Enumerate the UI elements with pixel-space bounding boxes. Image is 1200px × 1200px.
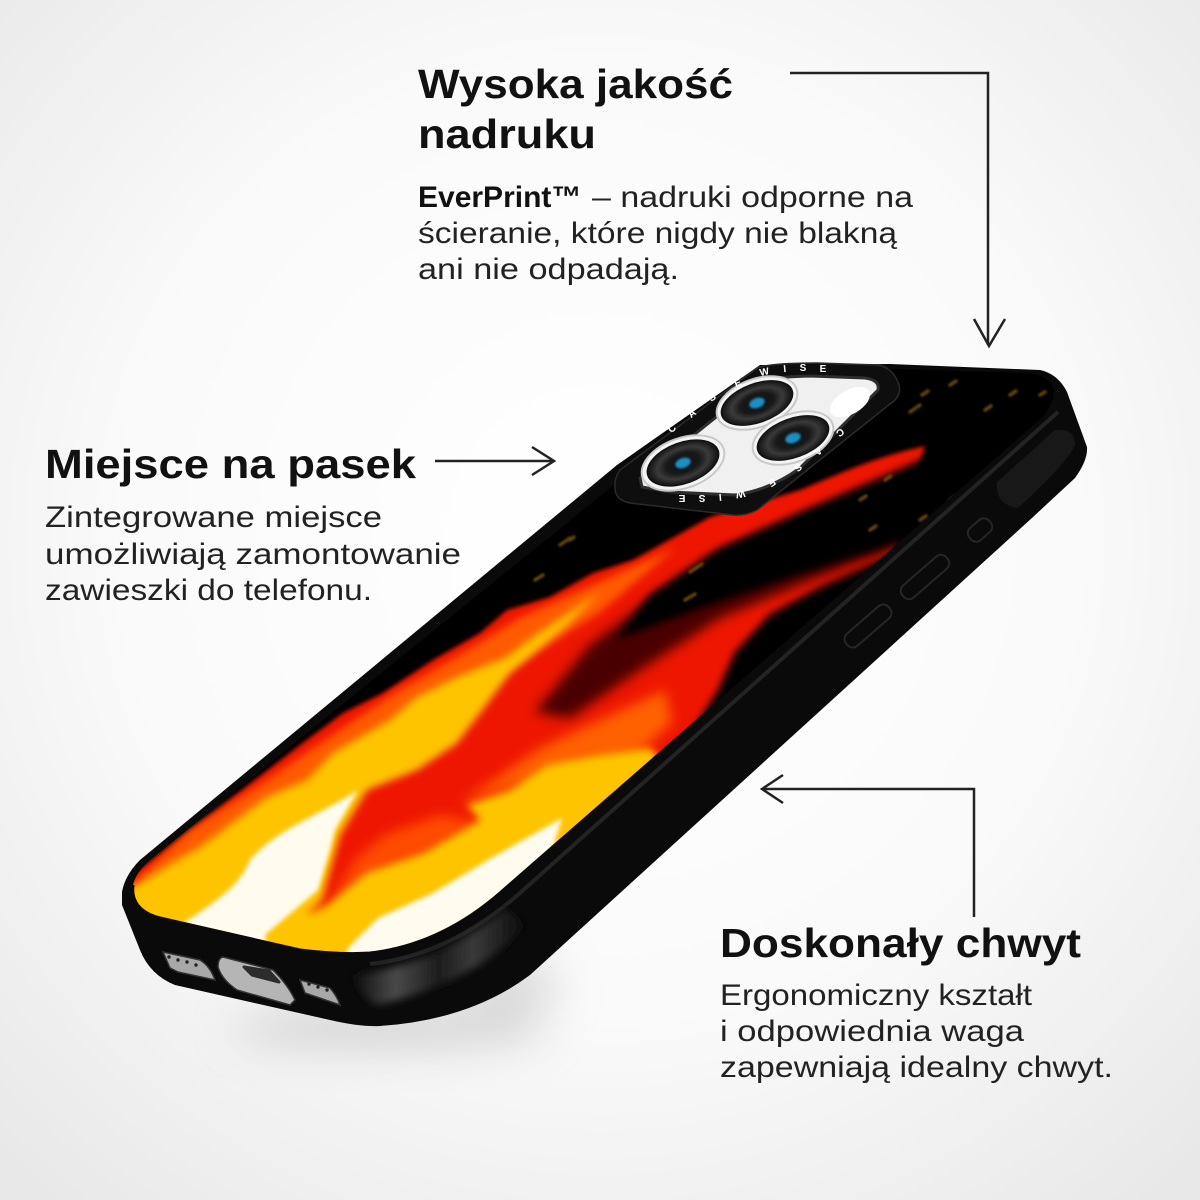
description: Zintegrowane miejsce bbox=[45, 501, 382, 534]
lower right black bbox=[690, 553, 895, 735]
ring lettering: I bbox=[783, 364, 787, 375]
ring lettering: S bbox=[707, 391, 719, 404]
ring lettering bbox=[666, 363, 846, 503]
arrow: to strap slot bbox=[435, 447, 554, 475]
bottom ports bbox=[163, 952, 340, 1005]
camera window bbox=[640, 376, 878, 495]
USB port bbox=[218, 957, 295, 1005]
description: ani nie odpadają. bbox=[418, 253, 679, 286]
ring lettering: E bbox=[820, 364, 827, 375]
ring lettering: S bbox=[698, 492, 705, 503]
callout: grip bbox=[720, 920, 1113, 1084]
orange lower blob bbox=[328, 815, 480, 905]
ring lettering: E bbox=[678, 492, 685, 503]
ring lettering: C bbox=[666, 423, 679, 436]
gold sparks bbox=[535, 381, 1045, 600]
dark streak bbox=[614, 454, 932, 642]
cream flames bbox=[180, 788, 564, 952]
yellow flames bbox=[120, 592, 665, 970]
ring lettering: E bbox=[733, 377, 744, 390]
ring lettering: E bbox=[765, 476, 777, 489]
ring lettering: W bbox=[759, 366, 771, 379]
arrow: to print bbox=[790, 73, 1005, 346]
camera bump bbox=[615, 363, 900, 515]
heading: Miejsce na pasek bbox=[45, 441, 416, 487]
description: EverPrint™ bbox=[418, 181, 581, 214]
description: umożliwiają zamontowanie bbox=[45, 538, 461, 571]
description: ścieranie, które nigdy nie blakną bbox=[418, 217, 897, 250]
heading: Wysoka jakość bbox=[418, 61, 733, 107]
case body bbox=[122, 364, 1087, 1026]
description bbox=[45, 501, 461, 607]
ring lettering: I bbox=[718, 491, 722, 502]
callout: print quality: nadruku bbox=[418, 111, 596, 157]
ring lettering: S bbox=[800, 363, 807, 374]
arrow: to grip bbox=[762, 775, 974, 917]
dark red band bbox=[530, 524, 903, 726]
callout: strap slot bbox=[45, 441, 461, 607]
strap slot bbox=[997, 430, 1075, 508]
description: Ergonomiczny kształt bbox=[720, 979, 1033, 1012]
red flame bbox=[133, 443, 928, 918]
phone shadow bbox=[230, 957, 560, 1048]
ring lettering: C bbox=[833, 425, 846, 438]
ring lettering: W bbox=[734, 487, 746, 500]
orange upper tongue bbox=[458, 690, 672, 805]
left speaker bbox=[163, 952, 215, 980]
side bevel bbox=[370, 412, 1058, 964]
print edge rim bbox=[133, 392, 1055, 954]
description: – nadruki odporne na bbox=[592, 181, 913, 214]
description: zapewniają idealny chwyt. bbox=[720, 1051, 1113, 1084]
lens top bbox=[709, 366, 805, 440]
flash bbox=[825, 381, 875, 423]
ring lettering: S bbox=[791, 461, 804, 473]
printed flame back bbox=[133, 369, 1054, 952]
corner gloss bbox=[352, 908, 525, 1005]
phone case illustration bbox=[100, 340, 1100, 1026]
lens right bbox=[745, 401, 841, 475]
description bbox=[418, 181, 913, 286]
description: i odpowiednia waga bbox=[720, 1015, 1024, 1048]
right speaker bbox=[300, 980, 340, 1005]
description: zawieszki do telefonu. bbox=[45, 574, 372, 607]
description bbox=[720, 979, 1113, 1084]
callout: print quality bbox=[418, 61, 913, 286]
heading: Doskonały chwyt bbox=[720, 920, 1081, 966]
orange streak bbox=[135, 548, 675, 882]
lens left bbox=[634, 425, 732, 501]
ring lettering: A bbox=[811, 444, 824, 457]
ring lettering: A bbox=[686, 407, 699, 421]
side buttons bbox=[842, 515, 995, 650]
